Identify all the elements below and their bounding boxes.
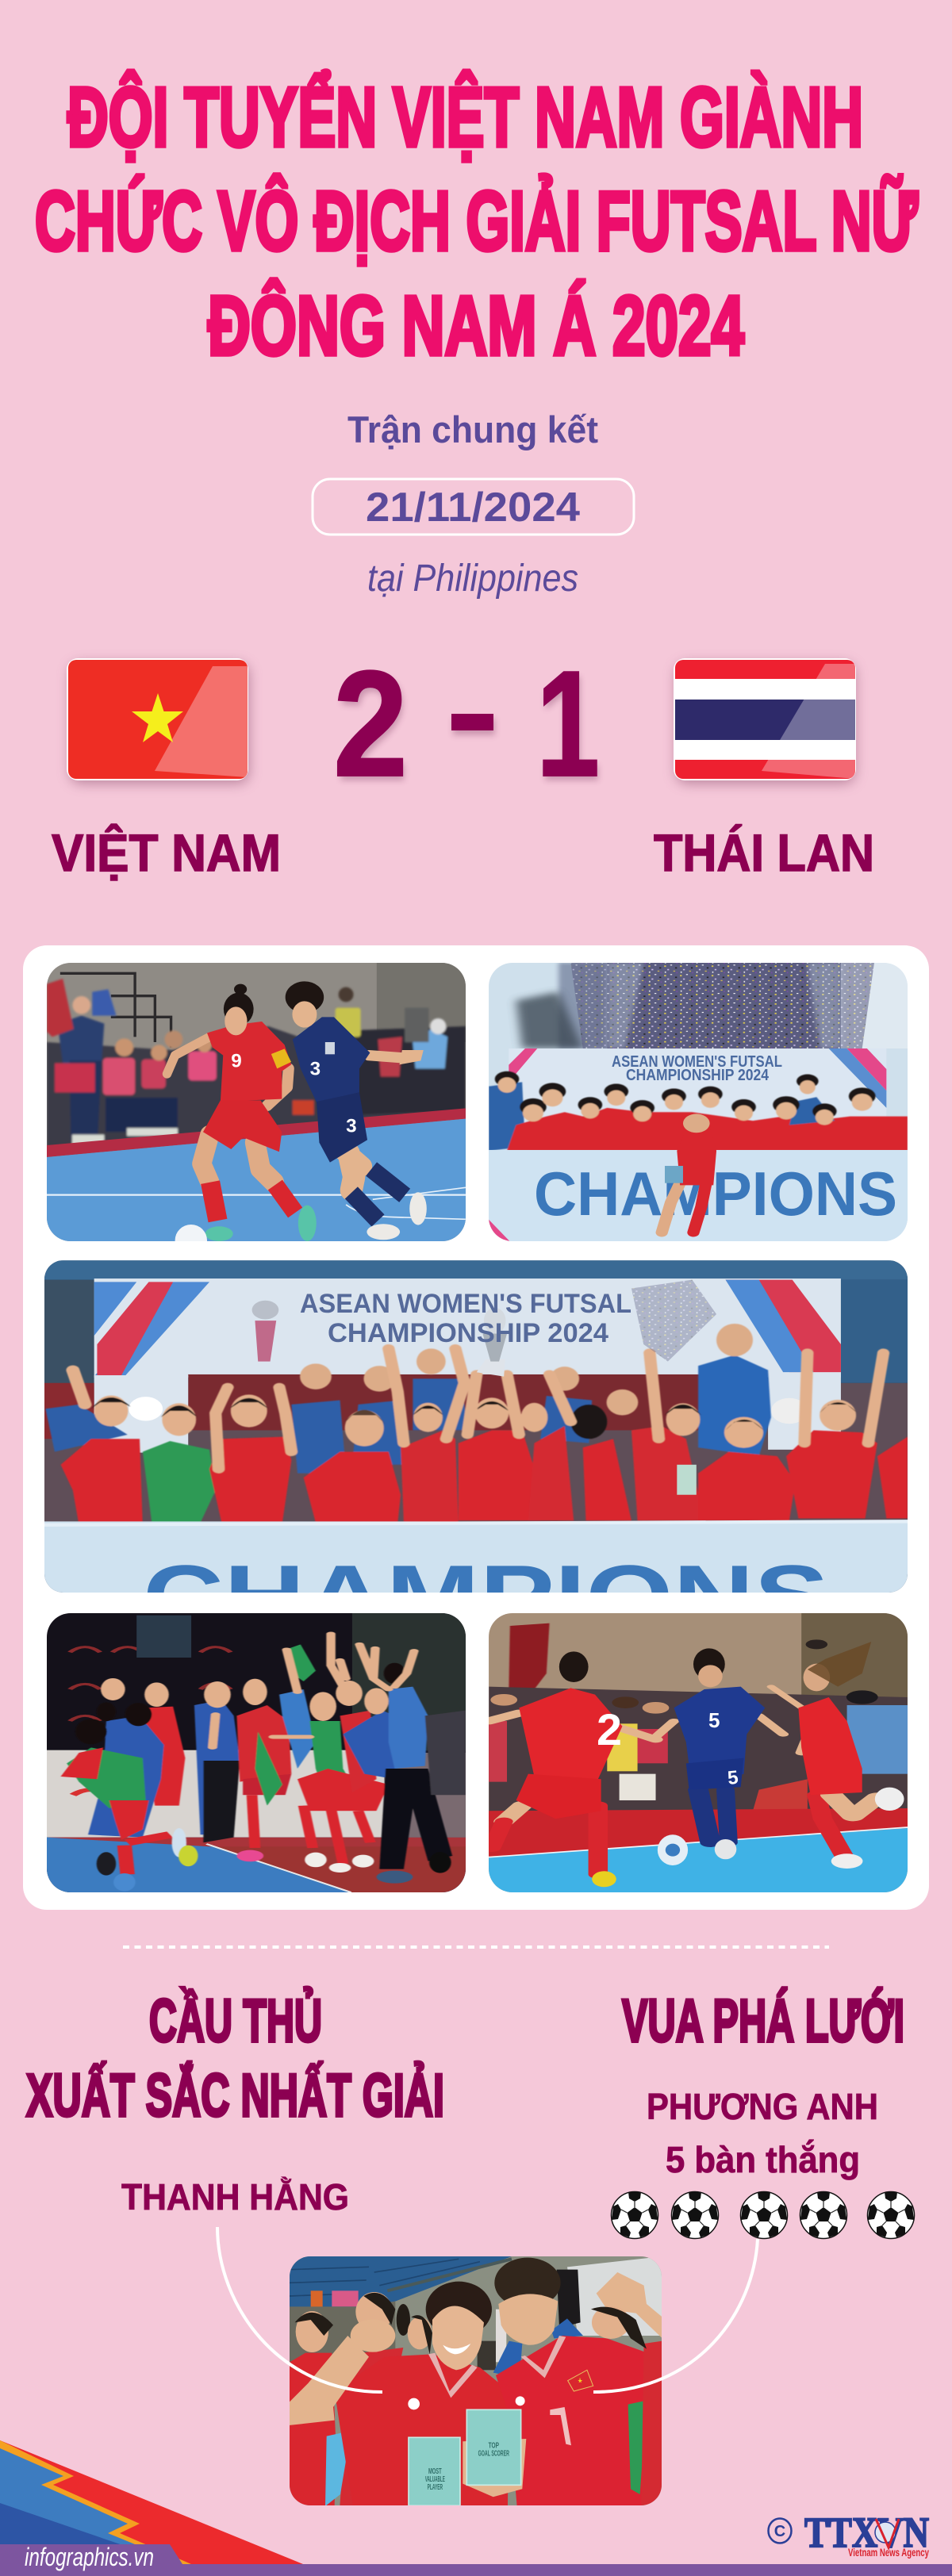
photo: match action, player number 2 xyxy=(489,1613,908,1892)
top scorer name: PHƯƠNG ANH xyxy=(647,2086,878,2127)
panel: photo collage xyxy=(23,945,929,1910)
photo: best player and top scorer: GOAL SCORER xyxy=(478,2450,509,2459)
photo: champions celebrating with confetti: CHAMPIONS xyxy=(534,1159,897,1229)
divider xyxy=(123,1945,829,1949)
photo: bench celebrating xyxy=(47,1613,466,1892)
score: 1 xyxy=(538,645,601,813)
label: Thailand: THÁI LAN xyxy=(654,823,874,882)
score: 2 xyxy=(333,640,408,808)
photo: team lifting trophy: ASEAN WOMEN'S FUTSAL xyxy=(300,1289,631,1319)
date box xyxy=(313,479,634,535)
goals count: 5 bàn thắng xyxy=(666,2139,860,2180)
photo: match action, Vietnam vs Thailand xyxy=(47,963,466,1256)
best player name: THANH HẰNG xyxy=(121,2176,349,2218)
heading: best player: XUẤT SẮC NHẤT GIẢI xyxy=(26,2061,444,2129)
photo: match action, player number 2: 5 xyxy=(708,1708,720,1732)
logo: TTXVN: C xyxy=(774,2523,785,2540)
title: ĐÔNG NAM Á 2024 xyxy=(208,279,744,373)
photo: champions celebrating with confetti: CHAMPIONSHIP 2024 xyxy=(626,1067,770,1084)
heading: best player xyxy=(26,1988,444,2129)
photo: best player and top scorer: VALUABLE xyxy=(425,2475,445,2484)
flag: Thailand xyxy=(674,658,856,784)
photo: match action, Vietnam vs Thailand: 9 xyxy=(231,1051,242,1072)
score xyxy=(333,640,601,813)
photo: match action, Vietnam vs Thailand: 3 xyxy=(310,1059,321,1080)
logo: TTXVN: TTXVN xyxy=(804,2509,929,2556)
source: infographics.vn: infographics.vn xyxy=(25,2543,154,2571)
photo: match action, Vietnam vs Thailand: 3 xyxy=(346,1115,357,1137)
date box: 21/11/2024 xyxy=(366,485,580,531)
photo: best player and top scorer: TOP xyxy=(489,2442,499,2451)
curved connector lines xyxy=(217,2227,758,2392)
photo: champions celebrating with confetti: ASEAN WOMEN'S FUTSAL xyxy=(612,1053,782,1071)
score: 2 xyxy=(336,645,409,813)
flag: Vietnam xyxy=(67,658,249,784)
venue: tại Philippines xyxy=(367,558,578,600)
photo: champions celebrating with confetti xyxy=(489,963,908,1241)
corner decoration xyxy=(0,2440,952,2576)
photo: team lifting trophy xyxy=(44,1260,908,1593)
logo: TTXVN xyxy=(768,2509,929,2559)
photo: team lifting trophy: CHAMPIONSHIP 2024 xyxy=(328,1318,608,1348)
photo: best player and top scorer: PLAYER xyxy=(428,2483,443,2492)
icons: five footballs xyxy=(611,2192,914,2238)
heading: best player: CẦU THỦ xyxy=(149,1988,322,2055)
label: Viet Nam: VIỆT NAM xyxy=(52,823,281,882)
score: 1 xyxy=(536,640,600,808)
photo: best player and top scorer: MOST xyxy=(428,2467,442,2476)
title xyxy=(35,71,918,373)
photo: match action, player number 2: 2 xyxy=(597,1704,622,1754)
subtitle: final match: Trận chung kết xyxy=(347,408,598,450)
photo: team lifting trophy: CHAMPIONS xyxy=(143,1547,829,1645)
photo: best player and top scorer xyxy=(287,2256,662,2506)
photo: match action, player number 2: 5 xyxy=(727,1767,739,1789)
